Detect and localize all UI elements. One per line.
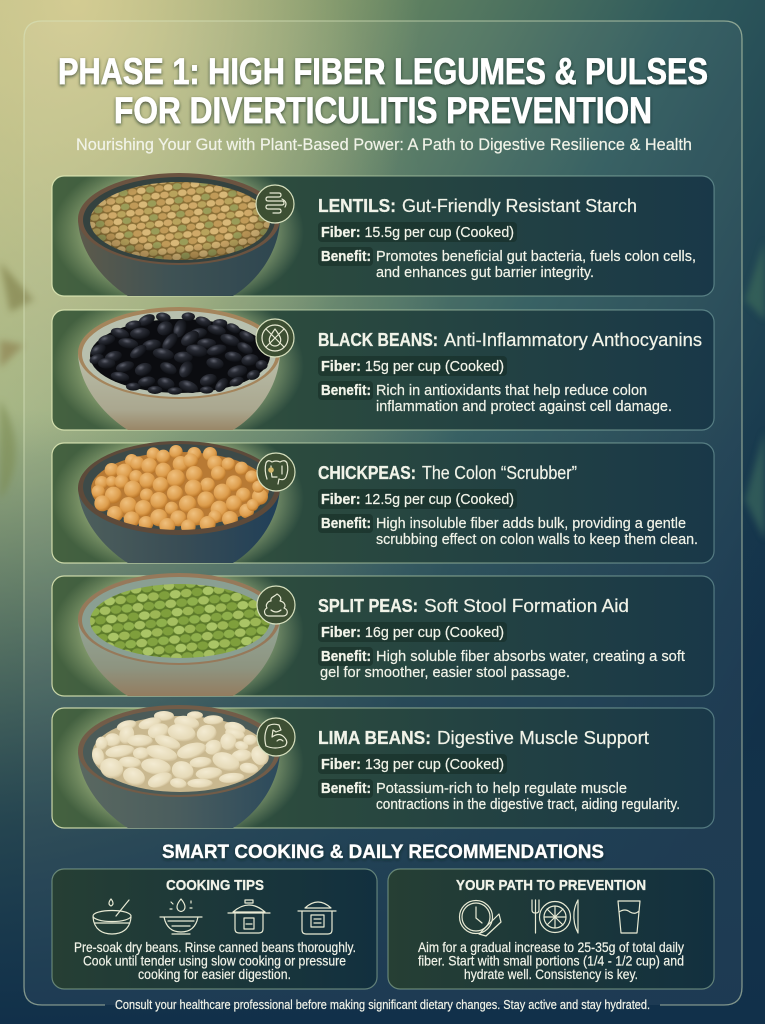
benefit: High insoluble fiber adds bulk, providing a gentle [376,516,686,532]
benefit: Benefit: [321,649,371,665]
subtitle: Nourishing Your Gut with Plant-Based Power: A Path to Digestive Resilience & Health [76,135,692,154]
icon: stool [257,586,295,624]
benefit [318,779,680,813]
benefit: contractions in the digestive tract, aiding regularity. [376,797,680,813]
benefit: Benefit: [321,383,371,399]
cooking tips text: Cook until tender using slow cooking or pressure [83,952,346,968]
bowl of split peas [56,573,300,696]
benefit: High soluble fiber absorbs water, creating a soft [376,649,685,665]
section heading: SMART COOKING & DAILY RECOMMENDATIONS [162,841,604,863]
panel: split peas [51,573,715,697]
benefit [318,247,696,281]
benefit: and enhances gut barrier integrity. [376,265,594,281]
fiber: Fiber: 15g per cup (Cooked) [321,359,504,375]
bowl of black beans [56,307,300,430]
icon: colander [160,899,202,934]
panel: black beans [51,307,715,431]
heading: Digestive Muscle Support [437,728,649,748]
heading: Soft Stool Formation Aid [424,596,629,616]
prevention text [418,939,684,982]
heading [318,463,577,483]
benefit [318,647,685,681]
panel: chickpeas [51,441,715,564]
benefit: scrubbing effect on colon walls to keep them clean. [376,532,698,548]
heading [318,330,702,350]
fiber: Fiber: 16g per cup (Cooked) [321,625,504,641]
heading: CHICKPEAS: [318,463,416,483]
heading [318,596,629,616]
title: FOR DIVERTICULITIS PREVENTION [114,89,652,131]
fiber: Fiber: 15.5g per cup (Cooked) [321,225,514,241]
heading: LENTILS: [318,196,396,216]
benefit: gel for smoother, easier stool passage. [320,665,570,681]
panel: cooking tips [52,869,377,989]
fiber: Fiber: 13g per cup (Cooked) [321,757,504,773]
prevention text: Aim for a gradual increase to 25-35g of total daily [418,939,684,955]
benefit: Promotes beneficial gut bacteria, fuels colon cells, [376,249,696,265]
cooking tips text [74,939,356,982]
bowl of lentils [56,173,300,296]
prevention text: fiber. Start with small portions (1/4 - 1/2 cup) and [418,952,684,968]
cooking tips heading: COOKING TIPS [166,878,264,894]
icon: colon [257,453,295,491]
benefit: Potassium-rich to help regulate muscle [376,781,627,797]
benefit [318,514,698,548]
benefit: Rich in antioxidants that help reduce colon [376,383,647,399]
icon: glass of water [618,901,640,933]
icon: pressure cooker [298,902,336,934]
benefit: Benefit: [321,249,371,265]
heading: Gut-Friendly Resistant Starch [402,196,637,216]
cooking tips text: Pre-soak dry beans. Rinse canned beans thoroughly. [74,939,356,955]
heading: The Colon “Scrubber” [422,463,577,483]
heading: SPLIT PEAS: [318,596,418,616]
icon: plate and cutlery [532,900,578,933]
panel: lima beans [51,705,715,829]
icon: mixing bowl [93,899,131,934]
prevention heading: YOUR PATH TO PREVENTION [456,878,646,894]
bowl of chickpeas [56,441,300,563]
icon: no inflammation [256,319,294,357]
title [58,50,708,131]
icon: muscle [257,718,295,756]
fiber: Fiber: 12.5g per cup (Cooked) [321,492,514,508]
bowl of lima beans [56,705,300,828]
panel: lentils [52,173,715,297]
benefit: Benefit: [321,781,371,797]
icon: intestine [256,185,294,223]
heading: LIMA BEANS: [318,728,431,748]
icon: rice cooker [228,900,270,933]
benefit: inflammation and protect against cell damage. [376,399,672,415]
footer disclaimer: Consult your healthcare professional before making significant dietary changes. Stay active and stay hydrated. [115,998,650,1012]
prevention text: hydrate well. Consistency is key. [464,966,638,982]
heading: BLACK BEANS: [318,330,438,350]
cooking tips text: cooking for easier digestion. [138,966,291,982]
benefit [318,381,672,415]
heading [318,728,649,748]
panel: your path to prevention [388,869,714,989]
icon: clock and tape [460,900,501,936]
heading: Anti-Inflammatory Anthocyanins [444,330,702,350]
benefit: Benefit: [321,516,371,532]
